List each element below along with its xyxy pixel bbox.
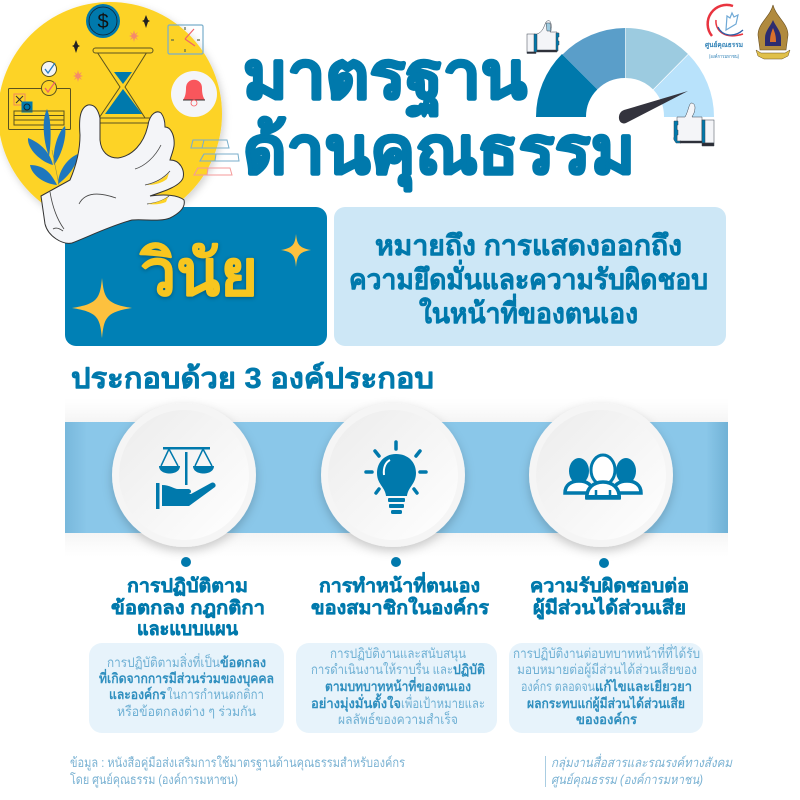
icon: scales on hand [156,447,216,509]
item 1 heading: และแบบแผน [137,619,238,640]
icon: dollar coin: $ [97,11,109,33]
title [243,38,635,192]
icon: group of people [565,455,641,500]
yellow circle [0,2,222,226]
icon: light bulb [366,442,426,514]
footer: source: โดย ศูนย์คุณธรรม (องค์การมหาชน) [70,772,238,788]
card 3: ขององค์กร [576,711,638,727]
card 1: ข้อตกลง [220,655,266,670]
footer: source: ข้อมูล : หนังสือคู่มือส่งเสริมการใช้มาตรฐานด้านคุณธรรมสำหรับองค์กร [70,755,405,771]
panel: definition: หมายถึง การแสดงออกถึง [375,230,682,261]
card 1: และองค์กร [109,686,167,702]
card 3: ผลกระทบแก่ผู้มีส่วนได้ส่วนเสีย [527,695,685,712]
small blocks [191,140,239,175]
card 2: ผลลัพธ์ของความสำเร็จ [338,710,458,727]
circle 3: people [529,403,673,547]
circle 1: scales [112,403,256,547]
card 2: เพื่อเป้าหมายและ [401,694,485,711]
card 2: ปฏิบัติ [453,662,485,678]
footer: credit: ศูนย์คุณธรรม (องค์การมหาชน) [551,772,703,788]
card 3: การปฏิบัติงานต่อบทบาทหน้าที่ที่ได้รับ [513,644,700,661]
icon: checklist card [8,62,70,130]
logo: moral center: (องค์การมหาชน) [709,53,739,60]
item 2 heading: การทำหน้าที่ตนเอง [319,572,480,597]
title: มาตรฐาน [243,38,527,118]
item 1 heading: การปฏิบัติตาม [127,576,248,597]
item 2 heading: ของสมาชิกในองค์กร [311,596,490,619]
item 3 heading: ความรับผิดชอบต่อ [530,576,689,597]
panel: definition: ในหน้าที่ของตนเอง [419,293,638,329]
needle [619,91,688,123]
icon: bell [171,71,217,117]
item 3 heading [530,558,689,620]
icon: thumbs up left [527,21,559,54]
card 2: การดำเนินงานให้ราบรื่น และ [311,660,453,677]
gauge chart [536,28,714,123]
card 1: ในการกำหนดกติกา [167,686,264,702]
card 1: หรือข้อตกลงต่าง ๆ ร่วมกัน [117,704,256,719]
card 2: การปฏิบัติงานและสนับสนุน [330,646,466,662]
logo: temple emblem [756,5,790,59]
card 1: ที่เกิดจากการมีส่วนร่วมของบุคคล [99,668,274,687]
logo: moral center [705,5,743,60]
icon: thumbs up right [674,103,714,146]
icon: dollar coin [86,4,120,38]
footer: credit: กลุ่มงานสื่อสารและรณรงค์ทางสังคม [551,753,733,771]
icon: blue plant [28,109,78,185]
card 3: องค์กร ตลอดจน [521,678,595,694]
card 2: อย่างมุ่งมั่นตั้งใจ [311,693,401,712]
card 3: แก้ไขและเยียวยา [595,678,692,694]
hand [41,105,184,243]
item 1 heading: ข้อตกลง กฎกติกา [111,597,265,619]
footer: source [70,755,405,788]
circle 2: bulb [321,403,465,547]
heading: components: ประกอบด้วย 3 องค์ประกอบ [71,361,434,395]
word: วินัย [139,237,258,309]
panel: term [65,207,327,346]
item 1 heading [111,557,265,640]
card 3: มอบหมายต่อผู้มีส่วนได้ส่วนเสียของ [517,662,697,678]
icon: clock [168,25,203,54]
card 2: ตามบทบาทหน้าที่ของตนเอง [325,676,471,694]
item 2 heading [311,557,490,619]
band with circles [65,398,728,557]
item 3 heading: ผู้มีส่วนได้ส่วนเสีย [533,596,686,620]
card 2 [296,643,497,733]
panel: definition [334,207,726,346]
sparkles [72,234,311,338]
card 1: การปฏิบัติตามสิ่งที่เป็น [107,653,220,670]
logo: moral center: ศูนย์คุณธรรม [705,40,743,50]
illustration: hand holding hourglass [8,4,239,243]
footer: credit [545,753,733,788]
card 3 [509,643,703,733]
panel: definition: ความยึดมั่นและความรับผิดชอบ [349,259,708,295]
icon: hourglass [93,48,153,123]
sparkles [72,15,150,82]
card 1 [89,643,284,733]
title: ด้านคุณธรรม [243,113,635,192]
